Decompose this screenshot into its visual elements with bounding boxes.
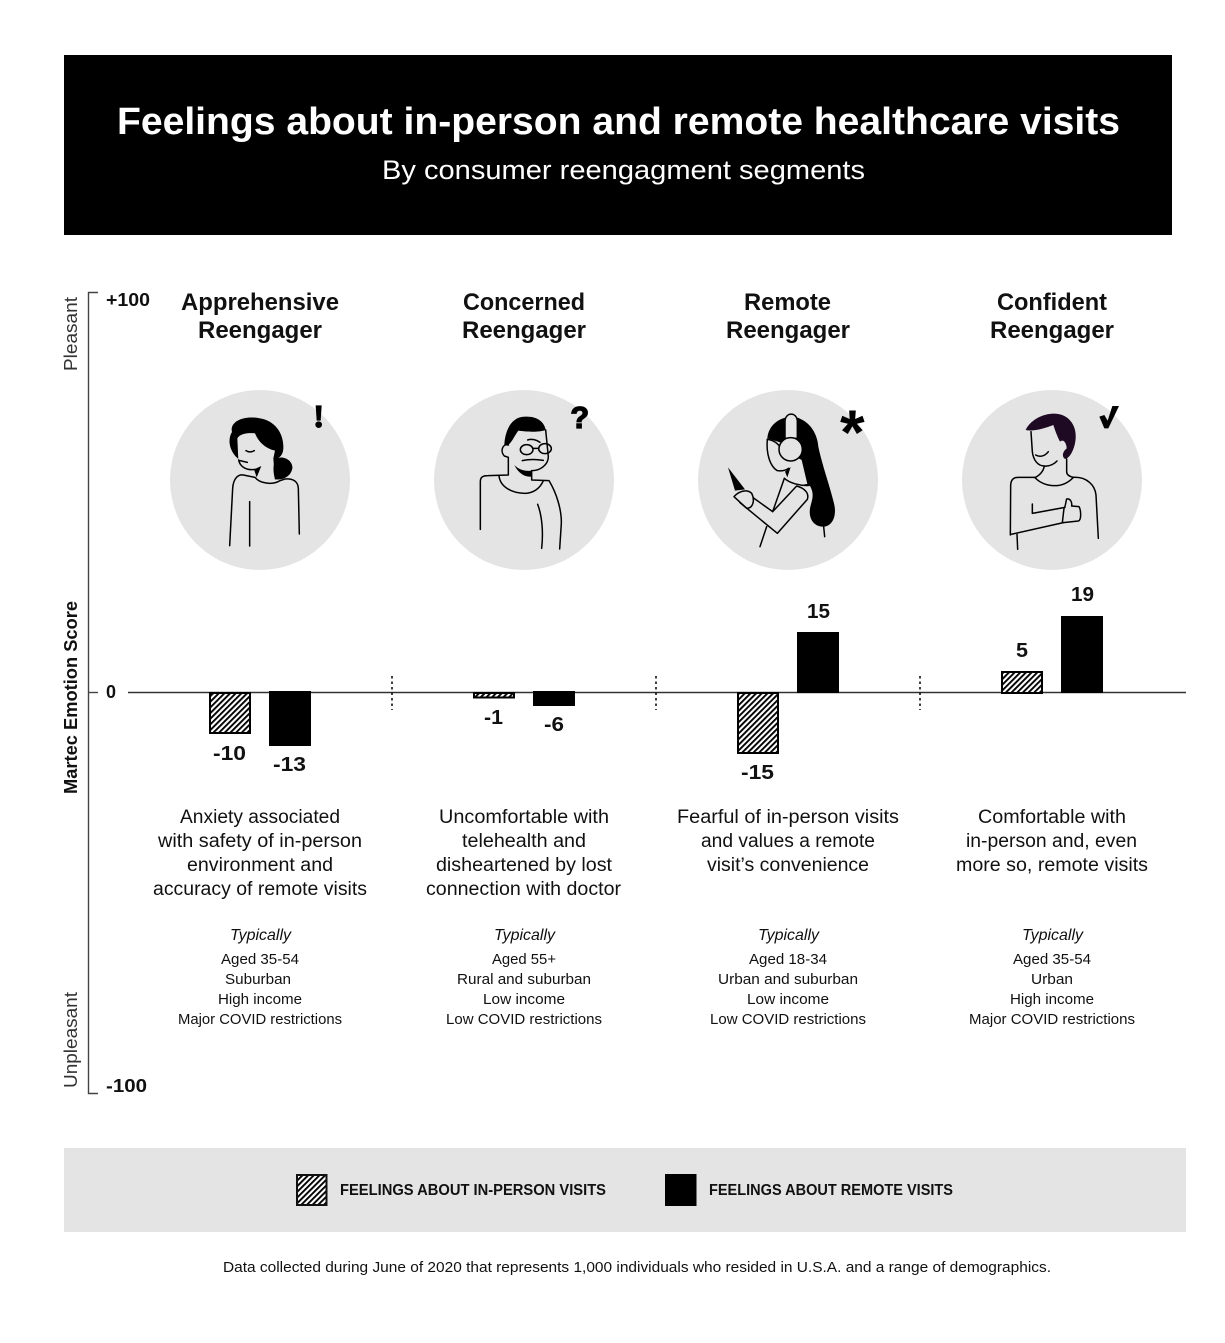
demographics xyxy=(710,927,866,1028)
bar chart: -10 xyxy=(213,743,246,765)
description: Uncomfortable with xyxy=(439,807,609,828)
heading xyxy=(726,289,850,344)
description: disheartened by lost xyxy=(436,855,613,876)
demographics: Typically xyxy=(494,927,556,944)
bar chart: -1 xyxy=(484,707,503,729)
heading xyxy=(181,289,339,344)
demographics: Major COVID restrictions xyxy=(178,1012,342,1028)
description xyxy=(153,807,367,900)
description: Anxiety associated xyxy=(180,807,340,828)
demographics: Low income xyxy=(483,992,565,1008)
demographics: Typically xyxy=(758,927,820,944)
legend label: remote: FEELINGS ABOUT REMOTE VISITS xyxy=(709,1182,953,1199)
icon: woman with headphones and phone xyxy=(698,390,878,570)
demographics: Typically xyxy=(1022,927,1084,944)
description: telehealth and xyxy=(462,831,586,852)
heading: Apprehensive xyxy=(181,289,339,316)
icon: man giving thumbs up xyxy=(962,390,1142,570)
demographics: Urban xyxy=(1031,972,1073,988)
footnote: Data collected during June of 2020 that represents 1,000 individuals who resided in U.S.A. and a range of demographics. xyxy=(223,1260,1051,1276)
demographics: Suburban xyxy=(225,972,291,988)
heading: Reengager xyxy=(462,317,586,344)
axis label: pleasant: Pleasant xyxy=(61,297,81,371)
description xyxy=(956,807,1148,876)
description: in-person and, even xyxy=(966,831,1137,852)
demographics: Aged 55+ xyxy=(492,952,556,968)
axis value: +100: +100 xyxy=(106,290,150,310)
subtitle: By consumer reengagment segments xyxy=(382,155,865,185)
description: Fearful of in-person visits xyxy=(677,807,899,828)
bar chart: 15 xyxy=(807,601,830,623)
demographics: Low COVID restrictions xyxy=(446,1012,602,1028)
demographics: High income xyxy=(218,992,302,1008)
zero baseline xyxy=(128,692,1186,694)
bar chart: 19 xyxy=(1071,584,1094,606)
axis label: unpleasant: Unpleasant xyxy=(61,992,81,1088)
heading xyxy=(990,289,1114,344)
description: with safety of in-person xyxy=(157,831,362,852)
demographics: Rural and suburban xyxy=(457,972,591,988)
description: more so, remote visits xyxy=(956,855,1148,876)
demographics xyxy=(178,927,342,1028)
heading: Reengager xyxy=(198,317,322,344)
icon: man with glasses xyxy=(434,390,614,570)
heading: Concerned xyxy=(463,289,585,316)
demographics: Low COVID restrictions xyxy=(710,1012,866,1028)
bar chart: -15 xyxy=(741,762,774,784)
bar chart xyxy=(474,691,575,736)
demographics: Major COVID restrictions xyxy=(969,1012,1135,1028)
legend swatch: in-person xyxy=(297,1175,326,1205)
icon: man with glasses: ? xyxy=(570,401,589,435)
icon: worried woman xyxy=(170,390,350,570)
description: accuracy of remote visits xyxy=(153,879,367,900)
column: confident reengager xyxy=(956,289,1148,1028)
title: Feelings about in-person and remote healthcare visits xyxy=(117,101,1120,143)
y axis xyxy=(61,290,150,1096)
heading: Confident xyxy=(997,289,1107,316)
bar chart: -6 xyxy=(544,714,564,736)
bar chart xyxy=(210,691,311,776)
demographics: Aged 35-54 xyxy=(1013,952,1091,968)
legend label: in-person: FEELINGS ABOUT IN-PERSON VISITS xyxy=(340,1182,606,1199)
description: and values a remote xyxy=(701,831,875,852)
description: environment and xyxy=(187,855,333,876)
demographics: Aged 18-34 xyxy=(749,952,827,968)
axis value: 0: 0 xyxy=(106,682,116,702)
column: apprehensive reengager xyxy=(153,289,367,1028)
demographics: Typically xyxy=(230,927,292,944)
demographics xyxy=(969,927,1135,1028)
description: visit’s convenience xyxy=(707,855,869,876)
demographics: Aged 35-54 xyxy=(221,952,299,968)
demographics: High income xyxy=(1010,992,1094,1008)
heading: Remote xyxy=(744,289,831,316)
icon: woman with headphones and phone: * xyxy=(840,398,865,468)
description: connection with doctor xyxy=(426,879,622,900)
heading xyxy=(462,289,586,344)
axis value: -100: -100 xyxy=(106,1076,147,1096)
bar chart: 5 xyxy=(1016,640,1028,662)
bar chart: -13 xyxy=(273,754,306,776)
legend xyxy=(64,1148,1186,1232)
description: Comfortable with xyxy=(978,807,1126,828)
bar chart xyxy=(1002,584,1103,693)
description xyxy=(677,807,899,876)
column: remote reengager xyxy=(677,289,899,1028)
bar chart xyxy=(738,601,839,784)
header banner xyxy=(64,55,1172,235)
legend swatch: remote xyxy=(665,1174,696,1206)
demographics: Urban and suburban xyxy=(718,972,858,988)
description xyxy=(426,807,622,900)
axis label: score: Martec Emotion Score xyxy=(61,601,81,794)
column: concerned reengager xyxy=(426,289,622,1028)
demographics xyxy=(446,927,602,1028)
heading: Reengager xyxy=(726,317,850,344)
demographics: Low income xyxy=(747,992,829,1008)
heading: Reengager xyxy=(990,317,1114,344)
